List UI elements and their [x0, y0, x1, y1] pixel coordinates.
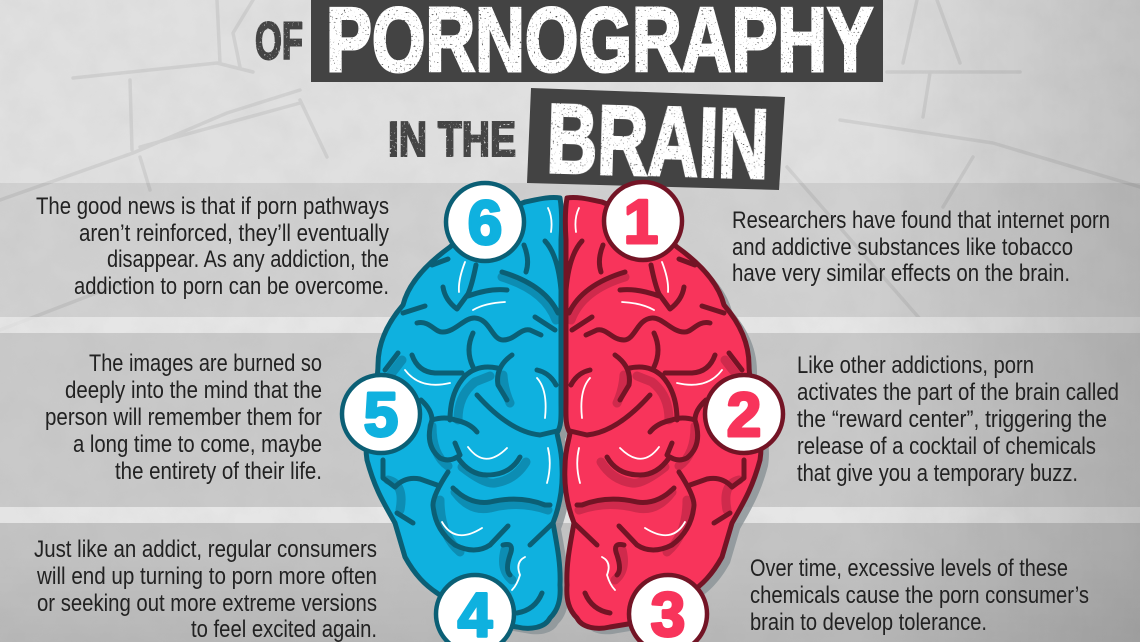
text block 3 — [750, 555, 1089, 636]
title words: IN THE: IN THE — [388, 113, 516, 167]
text block 2 — [797, 352, 1119, 487]
badge 5 — [342, 375, 420, 453]
text block 2: that give you a temporary buzz. — [797, 460, 1078, 487]
text block 4: Just like an addict, regular consumers — [34, 536, 377, 563]
text block 6: addiction to porn can be overcome. — [74, 273, 389, 300]
text block 6: The good news is that if porn pathways — [36, 193, 389, 220]
text block 1: and addictive substances like tobacco — [732, 234, 1073, 261]
title — [255, 0, 883, 199]
text block 4: or seeking out more extreme versions — [37, 590, 377, 617]
text block 4 — [34, 536, 377, 642]
badge 1 — [604, 182, 682, 260]
brain illustration — [366, 197, 769, 634]
title banner: BRAIN: BRAIN — [545, 83, 770, 199]
text block 3: chemicals cause the porn consumer’s — [750, 582, 1089, 609]
badge 4 — [436, 575, 514, 642]
text block 3: brain to develop tolerance. — [750, 609, 987, 636]
text block 1: have very similar effects on the brain. — [732, 260, 1070, 287]
badge 6: 6 — [468, 189, 502, 258]
text block 5 — [45, 350, 322, 485]
right hemisphere: red — [565, 197, 761, 628]
badge 1: 1 — [624, 188, 658, 257]
badge 3 — [629, 575, 707, 642]
badge 2 — [705, 375, 783, 453]
text block 5: The images are burned so — [89, 350, 322, 377]
badge 6 — [446, 183, 524, 261]
text block 6: disappear. As any addiction, the — [107, 246, 389, 273]
badge 5: 5 — [364, 381, 398, 450]
text block 2: release of a cocktail of chemicals — [797, 433, 1096, 460]
badge 2: 2 — [727, 381, 761, 450]
text block 1 — [732, 207, 1110, 287]
left hemisphere: blue — [366, 197, 562, 628]
text block 5: person will remember them for — [45, 404, 322, 431]
text block 5: the entirety of their life. — [115, 458, 322, 485]
title word: OF: OF — [255, 12, 303, 71]
text block 3: Over time, excessive levels of these — [750, 555, 1068, 582]
text block 5: deeply into the mind that the — [65, 377, 322, 404]
text block 4: will end up turning to porn more often — [36, 563, 377, 590]
text block 2: Like other addictions, porn — [797, 352, 1034, 379]
text block 6: aren’t reinforced, they’ll eventually — [79, 220, 389, 247]
text block 5: a long time to come, maybe — [73, 431, 322, 458]
brain shadow — [374, 203, 769, 634]
text block 6 — [36, 193, 389, 300]
